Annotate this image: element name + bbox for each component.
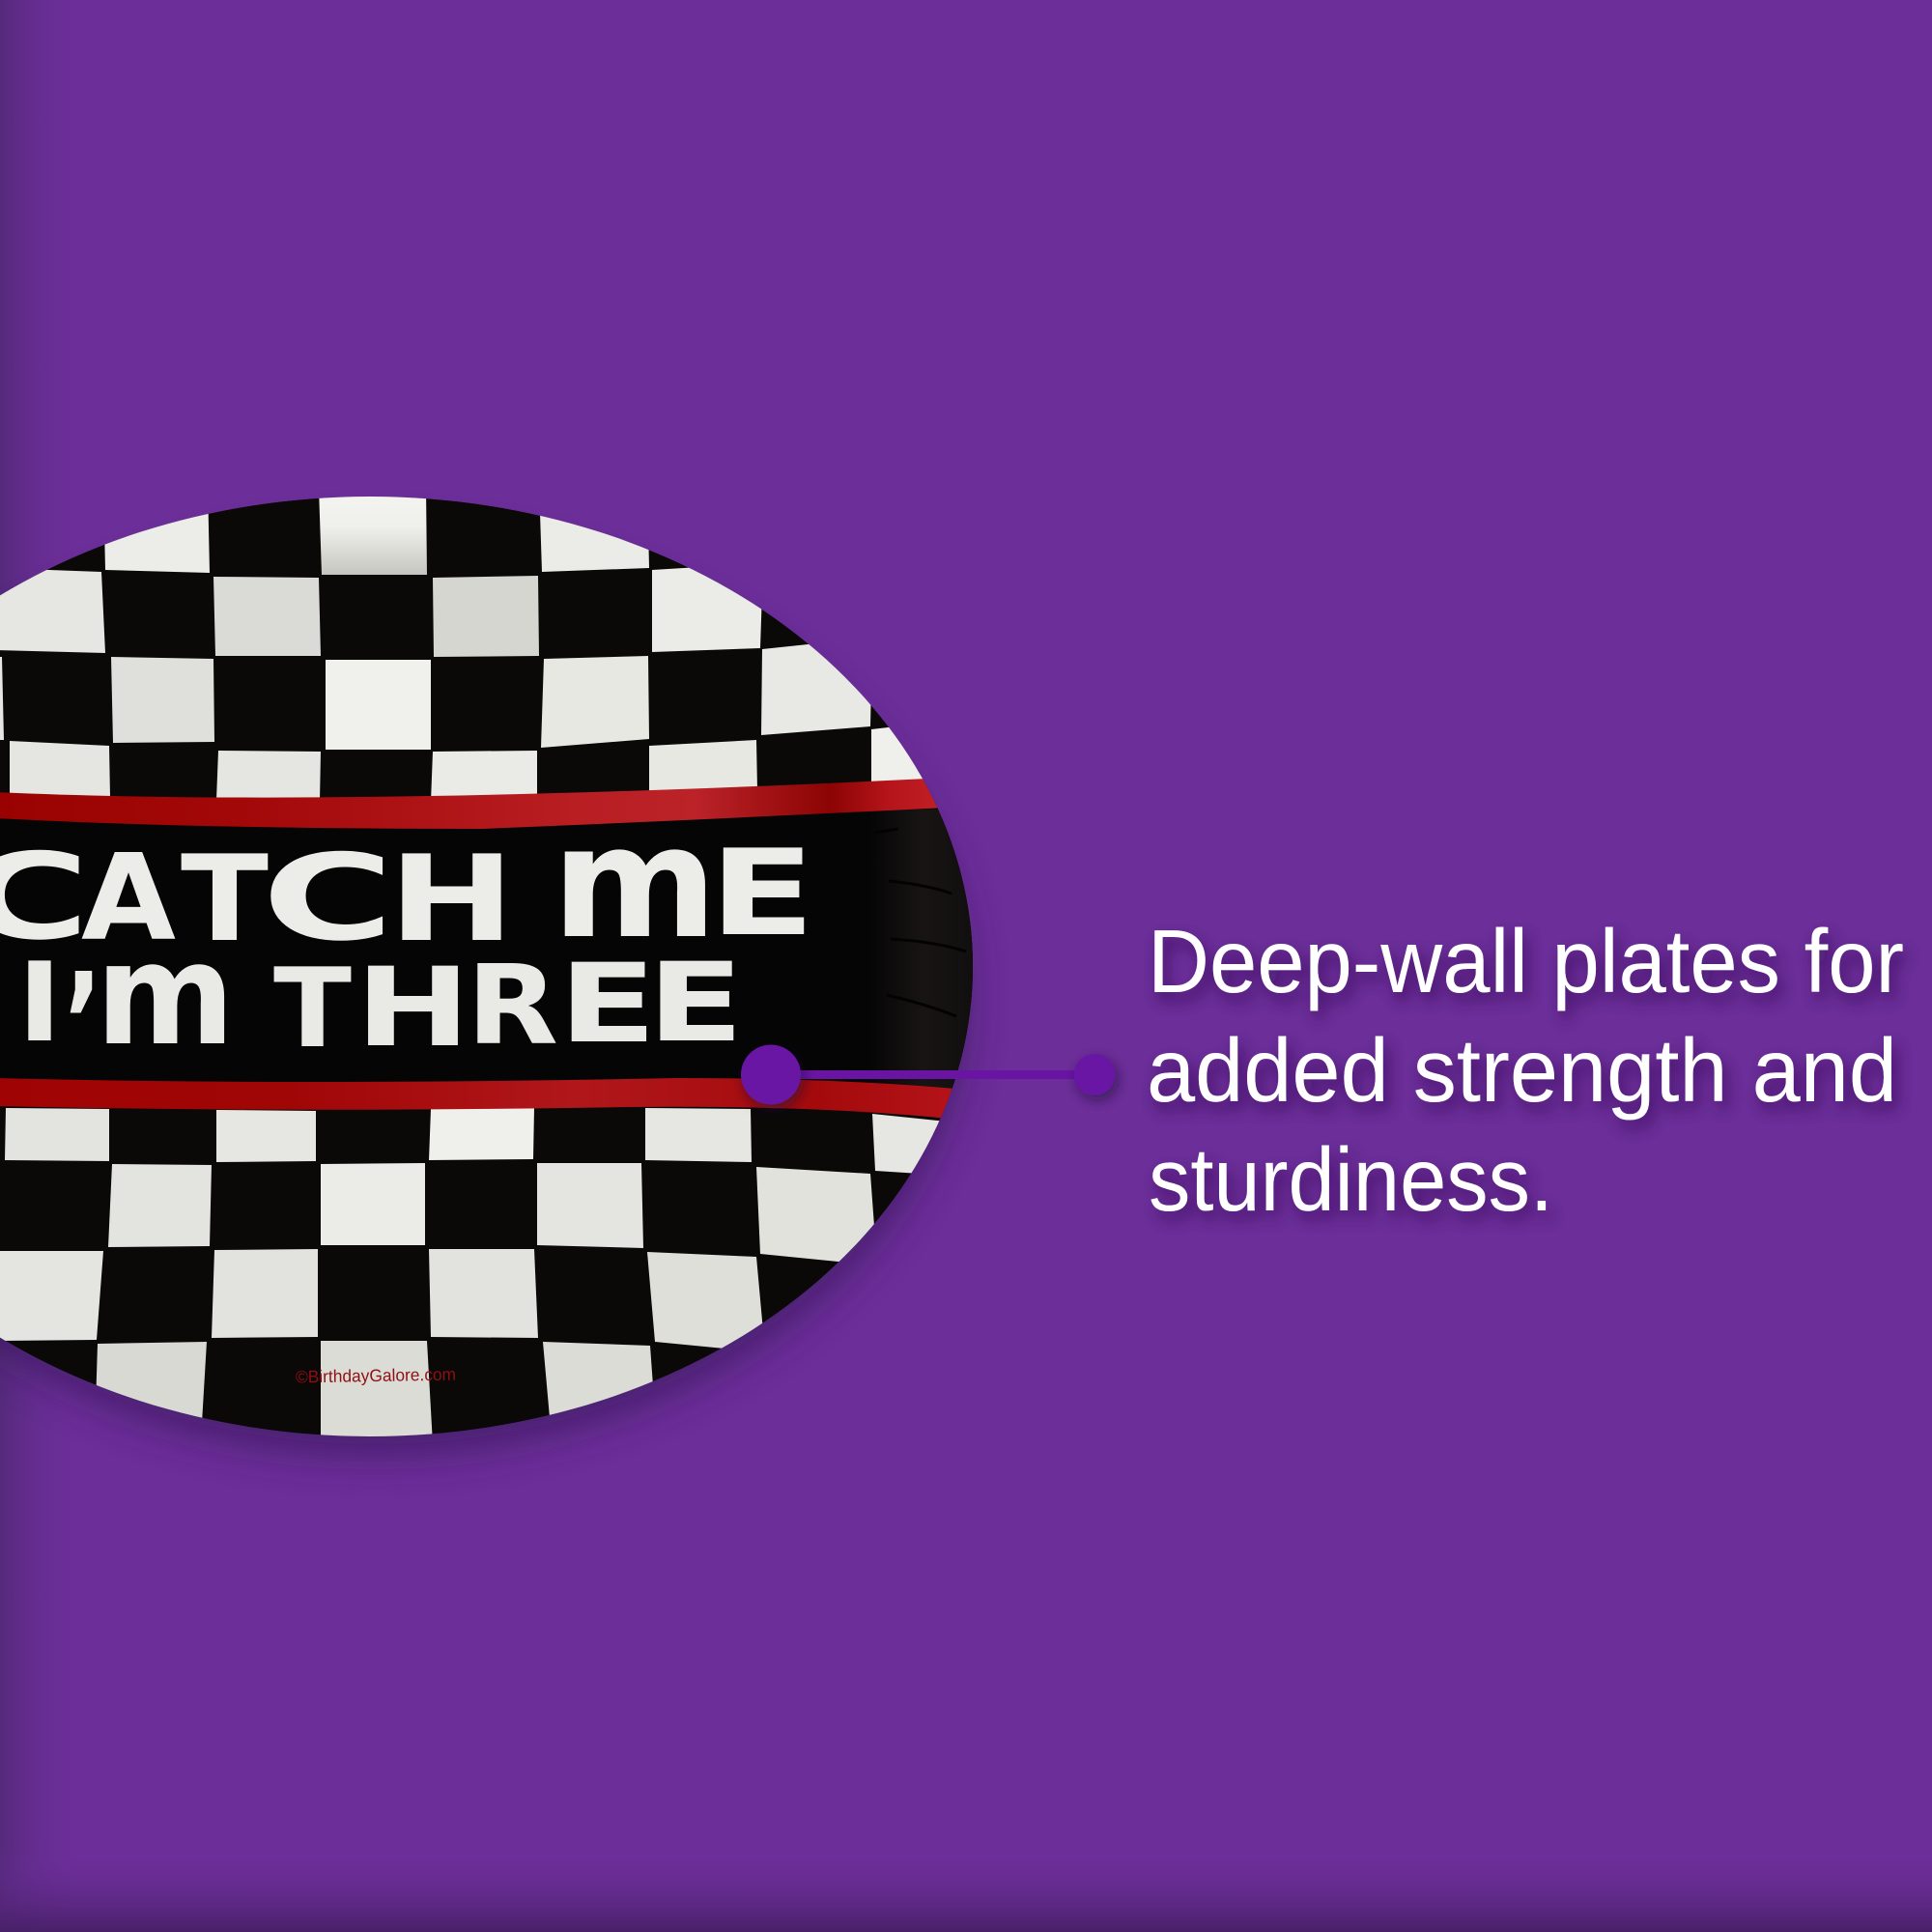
plate title: CATCH ME: E [709,825,815,963]
plate title: CATCH ME: m [552,792,718,973]
checkerboard white squares, upper [0,483,956,802]
plate title: CATCH ME: T [181,831,269,969]
callout text: Deep-wall plates for [1148,911,1904,1011]
plate title: I'M THREE: I [17,939,62,1066]
anchor dot on plate [741,1045,801,1105]
checkerboard white squares, lower [0,1108,966,1444]
plate title: I'M THREE [28,960,734,1046]
end dot [1074,1054,1115,1095]
plate title: I'M THREE: E [647,939,744,1066]
callout text: added strength and [1147,1020,1897,1121]
plate [0,483,976,1444]
plate title: I'M THREE: m [96,913,235,1077]
plate title: CATCH ME: A [81,830,176,968]
plate shadow [0,533,969,1457]
callout connector [741,1045,1115,1105]
plate base [0,497,973,1436]
plate title: CATCH ME: H [388,831,515,969]
plate title: I'M THREE: R [467,942,558,1069]
connector line [797,1070,1077,1079]
plate title: I'M THREE: T [273,945,352,1072]
callout text [1147,911,1904,1230]
brand mark: ©BirthdayGalore.com [296,1365,456,1386]
plate title: I'M THREE: ’ [64,945,102,1102]
plate title: I'M THREE: E [558,940,657,1067]
plate wall ribs [893,810,973,1092]
lower red stripe [0,1078,966,1121]
callout text: sturdiness. [1149,1129,1553,1230]
plate title: I'M THREE: H [355,944,470,1071]
black centre band [935,802,973,1090]
plate title: CATCH ME: C [262,830,394,968]
upper red stripe [0,779,937,829]
plate title: CATCH ME [0,847,804,941]
